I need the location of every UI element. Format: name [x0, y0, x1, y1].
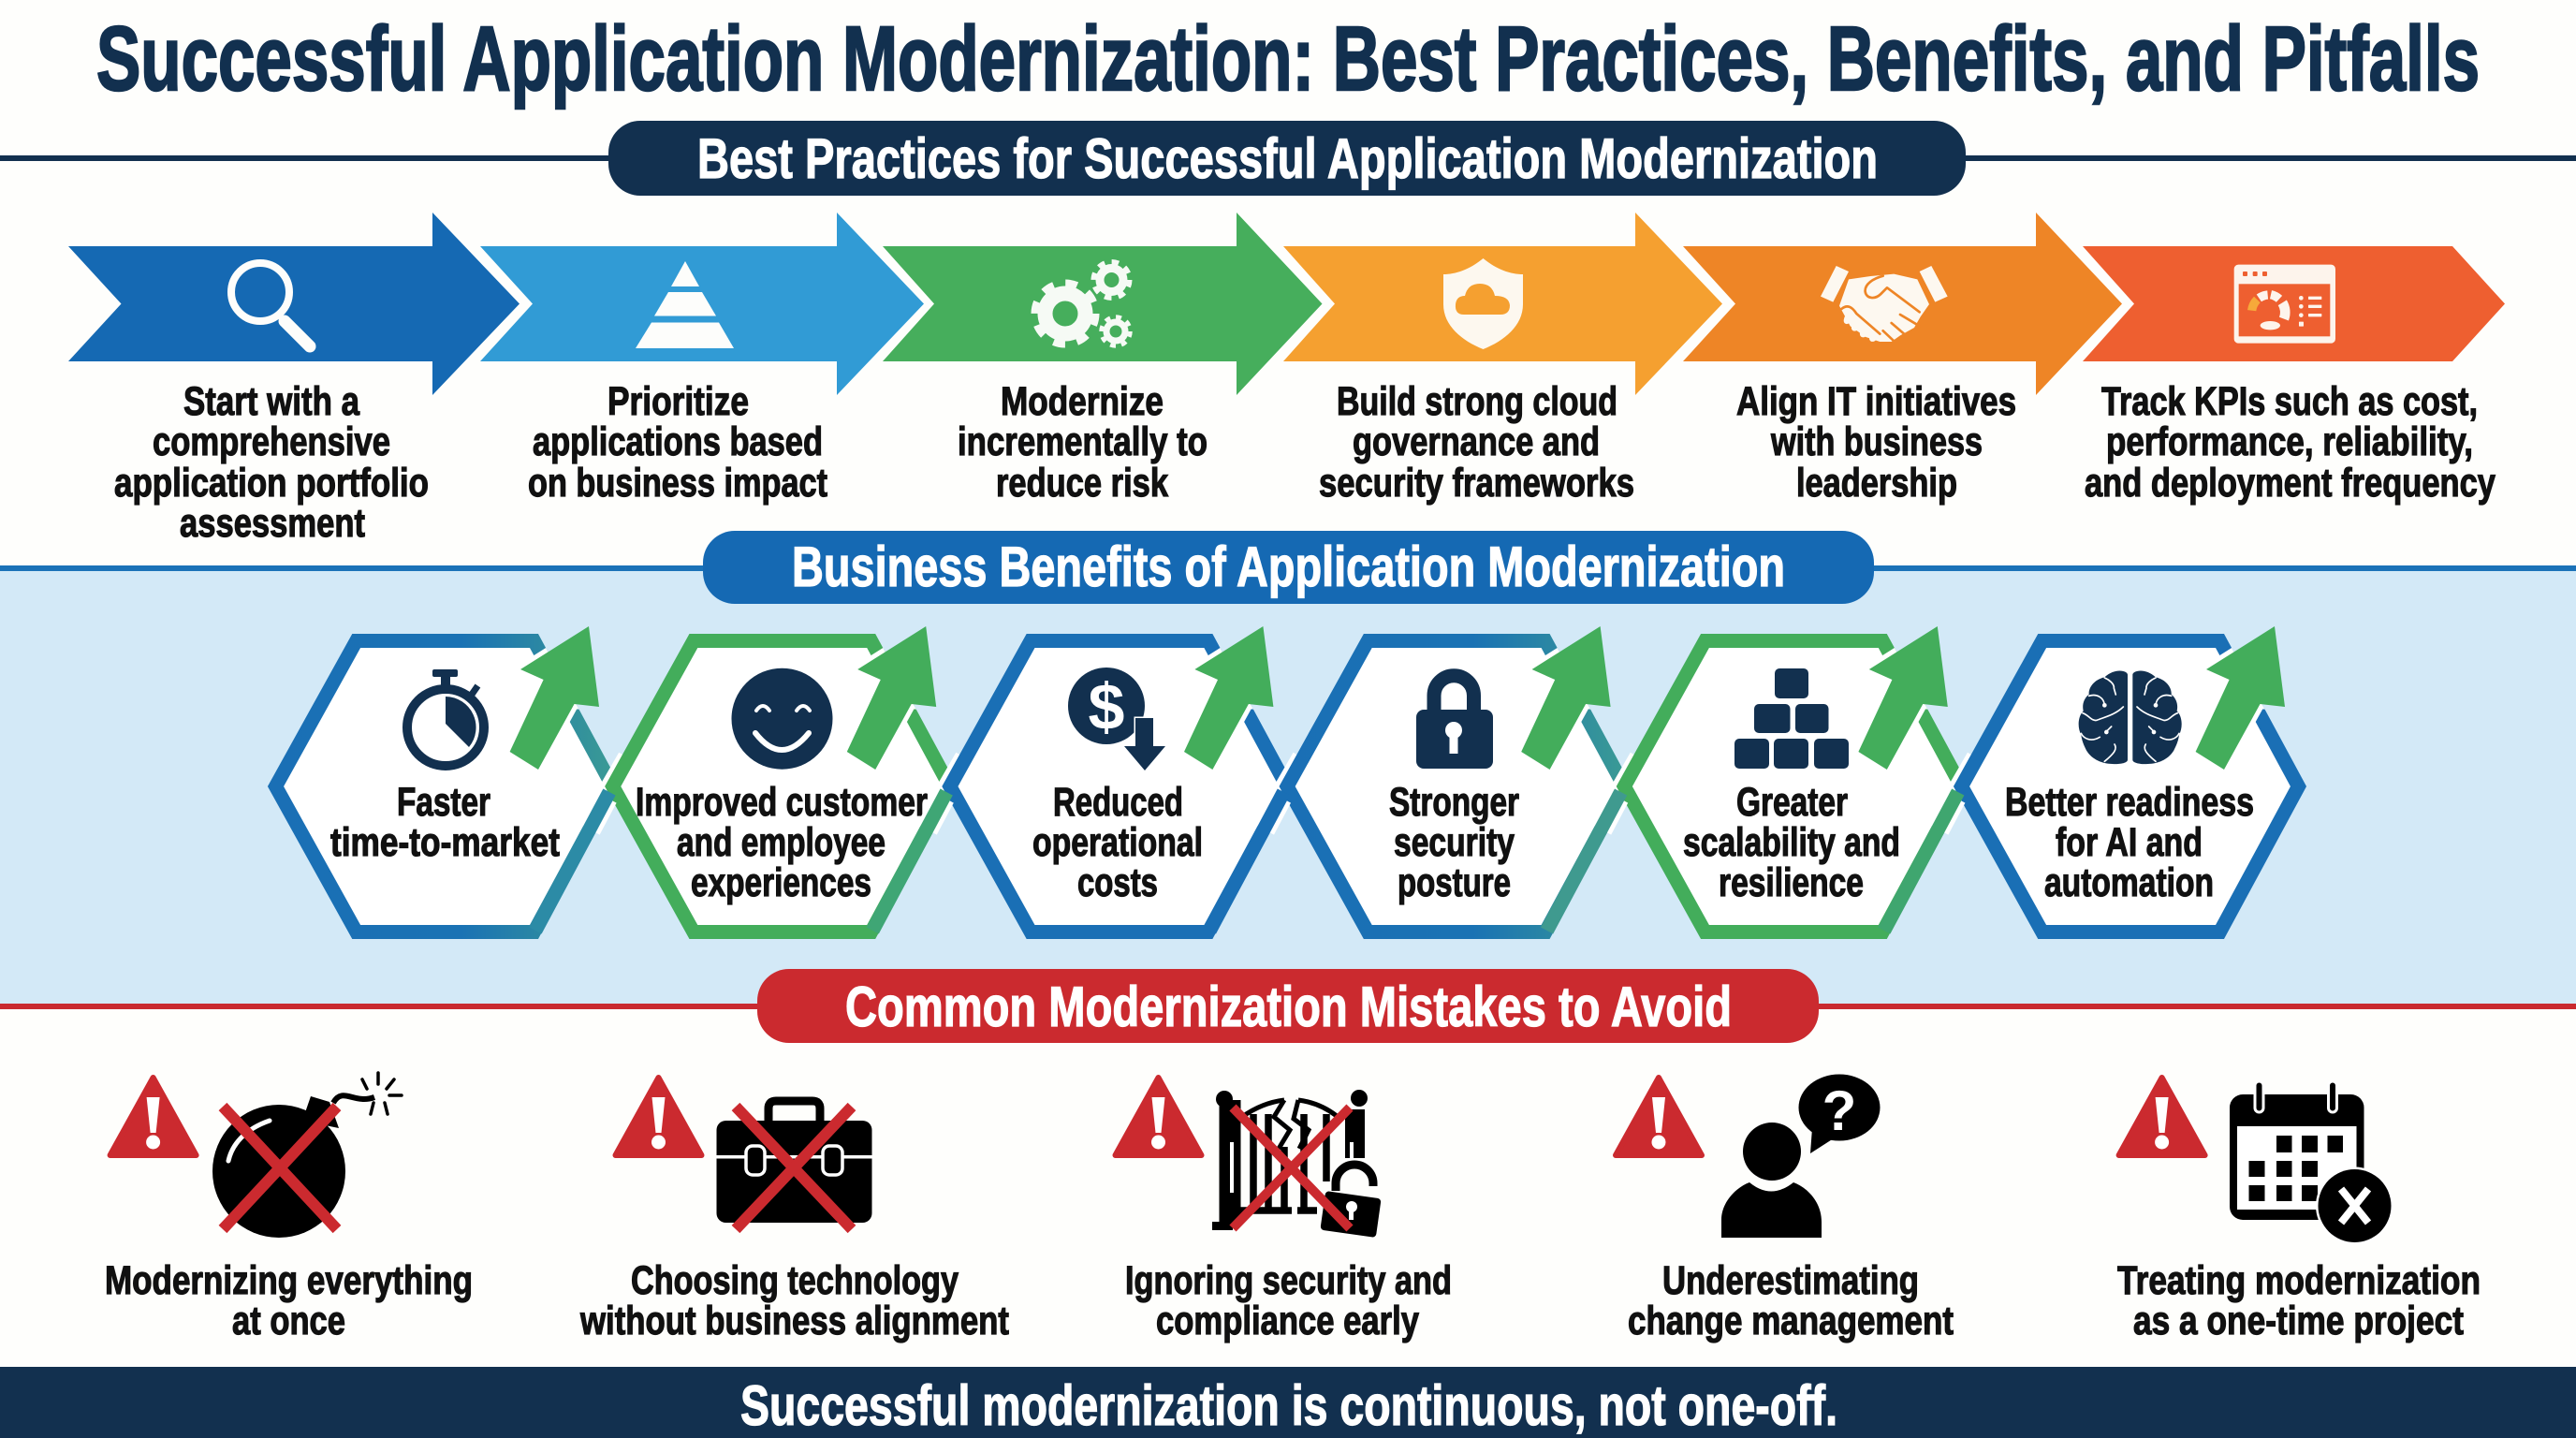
caption 4: [1319, 379, 1634, 506]
caption: resilience: [1719, 860, 1864, 905]
caption 1: assessment: [180, 501, 365, 546]
heading: business benefits: [703, 531, 1874, 604]
caption 6: [2085, 379, 2496, 506]
panel: mistakes: [105, 1073, 2481, 1343]
heading: common mistakes: Common Modernization Mistakes to Avoid: [845, 976, 1732, 1038]
caption: Reduced: [1053, 780, 1183, 825]
warning triangle 4: [1616, 1078, 1702, 1155]
benefit 2 improved experiences: [535, 626, 950, 932]
caption 2: applications based: [533, 419, 823, 464]
caption: Improved customer: [636, 780, 928, 825]
icon: briefcase crossed out: [717, 1101, 872, 1229]
benefit 4 stronger security: [1209, 626, 1624, 932]
caption: compliance early: [1156, 1299, 1419, 1343]
caption: [579, 1258, 1009, 1343]
caption 2: [528, 379, 827, 506]
icon: KPI dashboard window: [2234, 265, 2335, 344]
caption: [1628, 1258, 1954, 1343]
caption: as a one-time project: [2133, 1299, 2464, 1343]
caption: operational: [1032, 820, 1203, 865]
mistake 3 ignoring security: [1116, 1078, 1452, 1343]
mistake 4 change management: [1616, 1075, 1954, 1343]
caption: [1389, 780, 1519, 905]
caption: [2117, 1258, 2481, 1343]
caption: [636, 780, 928, 905]
caption 4: Build strong cloud: [1337, 379, 1617, 424]
caption: [1032, 780, 1203, 905]
step 3 incremental: [883, 213, 1322, 506]
caption: [1683, 780, 1900, 905]
caption 3: Modernize: [1001, 379, 1164, 424]
caption 3: incrementally to: [958, 419, 1208, 464]
benefit 3 reduced costs: [872, 626, 1287, 932]
caption 5: [1736, 379, 2016, 506]
warning triangle 2: [616, 1078, 702, 1155]
growth arrow 3: [1184, 626, 1273, 770]
caption: at once: [232, 1299, 345, 1343]
footer banner: [0, 1367, 2576, 1438]
icon: brain: [2079, 670, 2182, 764]
icon: dollar down: [1068, 668, 1165, 770]
growth arrow 1: [510, 626, 599, 770]
heading: best practices: [608, 121, 1966, 196]
caption 5: leadership: [1796, 461, 1957, 506]
caption 6: performance, reliability,: [2106, 419, 2473, 464]
mistake 1 modernizing everything: [105, 1073, 473, 1343]
caption: time-to-market: [330, 820, 560, 865]
icon: broken gate with padlock crossed out: [1212, 1090, 1382, 1238]
caption: security: [1394, 820, 1515, 865]
caption: [105, 1258, 473, 1343]
icon: gears: [1035, 262, 1131, 346]
icon: cloud shield: [1443, 258, 1523, 349]
icon: dollar down: $: [1089, 670, 1124, 743]
icon: person with question bubble: [1721, 1075, 1880, 1238]
caption 2: on business impact: [528, 461, 827, 506]
panel: benefit hexagons: [275, 626, 2299, 932]
icon: pyramid: [636, 261, 734, 348]
caption: change management: [1628, 1299, 1954, 1343]
growth arrow 6: [2196, 626, 2285, 770]
icon: calendar with X: [2230, 1081, 2391, 1242]
icon: stacked blocks: [1734, 668, 1849, 769]
caption: Greater: [1736, 780, 1848, 825]
heading: business benefits: Business Benefits of Application Modernization: [792, 536, 1785, 598]
caption: Underestimating: [1662, 1258, 1919, 1303]
caption 3: reduce risk: [996, 461, 1168, 506]
step 5 alignment: [1683, 213, 2122, 506]
caption 1: comprehensive: [153, 419, 390, 464]
caption 1: Start with a: [183, 379, 360, 424]
caption: automation: [2044, 860, 2214, 905]
icon: bomb crossed out: [212, 1073, 402, 1238]
icon: handshake: [1821, 266, 1948, 344]
caption 5: Align IT initiatives: [1736, 379, 2016, 424]
caption: costs: [1077, 860, 1158, 905]
growth arrow 4: [1521, 626, 1611, 770]
benefit 6 AI readiness: [1884, 626, 2299, 932]
caption: without business alignment: [579, 1299, 1009, 1343]
growth arrow 5: [1858, 626, 1948, 770]
heading: best practices: Best Practices for Successful Application Modernization: [697, 127, 1878, 190]
warning triangle 1: [110, 1078, 197, 1155]
step 1 assessment: [68, 213, 520, 546]
caption 4: security frameworks: [1319, 461, 1634, 506]
caption: scalability and: [1683, 820, 1900, 865]
step 6 KPIs: [2083, 246, 2505, 506]
caption 4: governance and: [1353, 419, 1600, 464]
mistake 5 one-time project: [2117, 1078, 2481, 1343]
caption: [2005, 780, 2254, 905]
caption: and employee: [677, 820, 886, 865]
footer banner: Successful modernization is continuous, not one-off.: [740, 1374, 1837, 1437]
panel: best practices arrows: [68, 213, 2505, 546]
caption 5: with business: [1770, 419, 1983, 464]
mistake 2 choosing technology: [579, 1078, 1009, 1343]
icon: magnifying glass: [231, 263, 310, 346]
icon: stopwatch: [407, 669, 484, 766]
caption: experiences: [691, 860, 871, 905]
caption: Better readiness: [2005, 780, 2254, 825]
caption: posture: [1398, 860, 1511, 905]
caption: Ignoring security and: [1125, 1258, 1452, 1303]
caption 2: Prioritize: [607, 379, 749, 424]
heading: common mistakes: [757, 969, 1819, 1043]
caption 1: application portfolio: [114, 461, 429, 506]
caption: Faster: [397, 780, 490, 825]
growth arrow 2: [847, 626, 936, 770]
icon: smiley: [732, 668, 833, 770]
step 4 governance: [1283, 213, 1722, 506]
warning triangle 5: [2119, 1078, 2205, 1155]
benefits section background: [0, 568, 2576, 1006]
caption: Treating modernization: [2117, 1258, 2481, 1303]
caption: for AI and: [2056, 820, 2203, 865]
benefit 1 faster time-to-market: [275, 626, 612, 932]
caption: Modernizing everything: [105, 1258, 473, 1303]
caption: [330, 780, 560, 865]
warning triangle 3: [1116, 1078, 1202, 1155]
caption 3: [958, 379, 1208, 506]
step 2 prioritize: [480, 213, 924, 506]
icon: padlock: [1416, 676, 1493, 769]
icon: person with question bubble: ?: [1822, 1079, 1856, 1142]
caption 1: [114, 379, 429, 546]
caption 6: Track KPIs such as cost,: [2101, 379, 2478, 424]
caption: Choosing technology: [631, 1258, 959, 1303]
caption: [1125, 1258, 1452, 1343]
caption: Stronger: [1389, 780, 1519, 825]
benefit 5 scalability: [1547, 626, 1961, 932]
